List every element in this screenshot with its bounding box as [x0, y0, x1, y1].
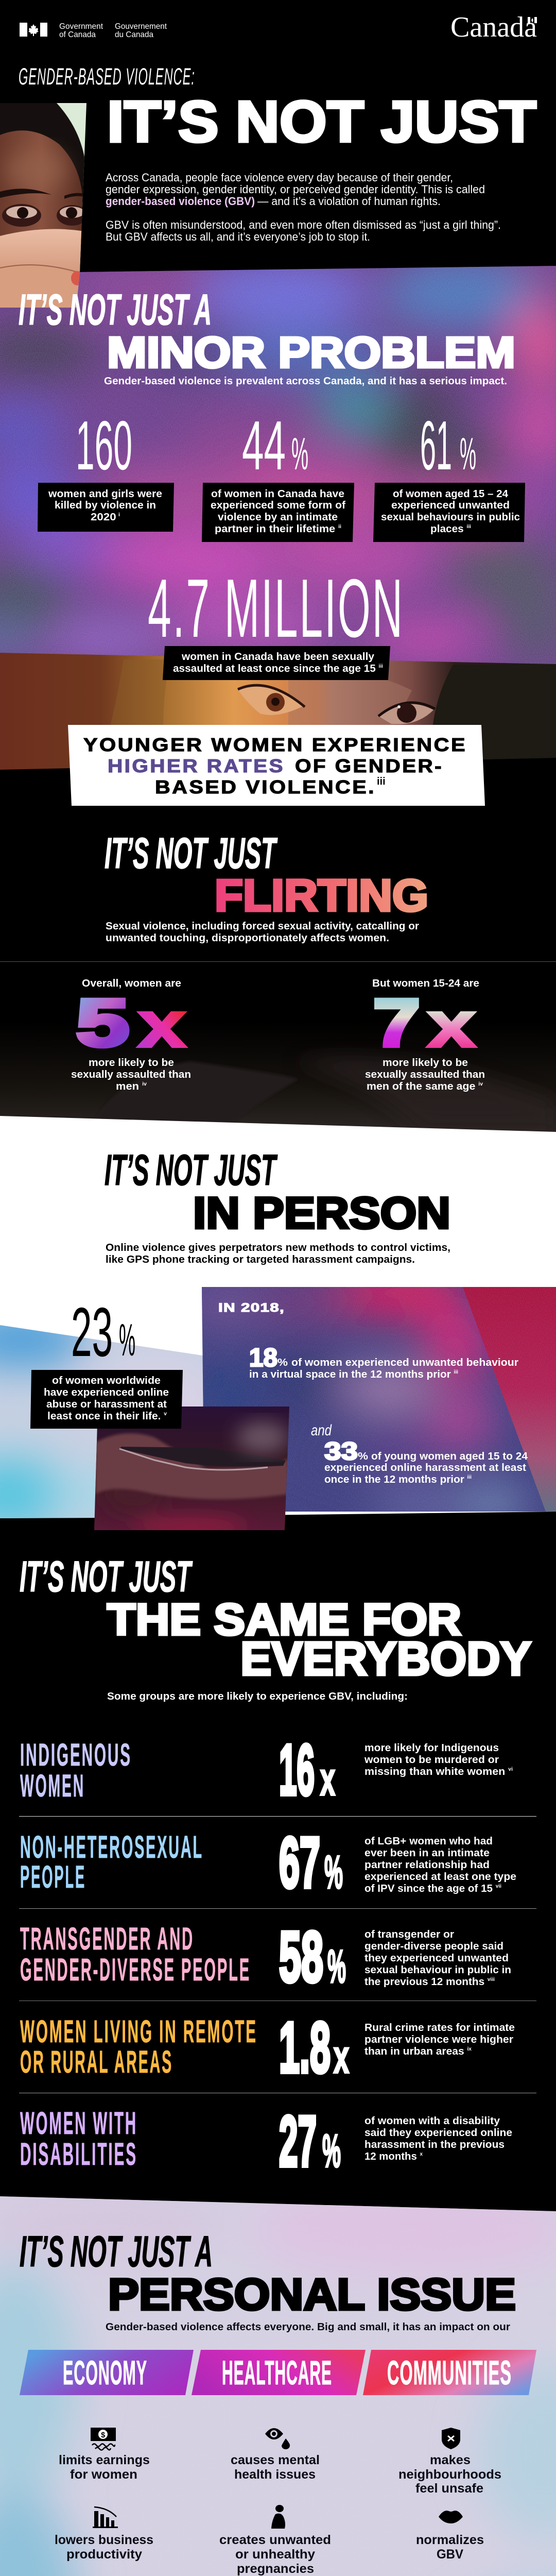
text block: introduction	[106, 171, 501, 243]
caption: 67%: of IPV since the age of 15	[364, 1883, 492, 1894]
label: non-heterosexual people: PEOPLE	[20, 1859, 86, 1894]
row: transgender and gender-diverse people: GENDER-DIVERSE PEOPLE	[20, 1952, 251, 1987]
row: women with disabilities	[20, 2102, 512, 2181]
caption: 44 percent	[211, 488, 345, 535]
label: women in remote or rural areas	[20, 2014, 257, 2079]
stat: 4.7 million	[148, 562, 404, 680]
caption: 16x: women to be murdered or	[364, 1754, 499, 1766]
caption: 44 percent: of women in Canada have	[211, 488, 344, 500]
stat: 33 percent: 33	[324, 1438, 358, 1465]
heading: it's not just (the same): IT’S NOT JUST	[20, 1552, 193, 1601]
label: Indigenous women: WOMEN	[20, 1768, 85, 1803]
text: causes mental health issues: causes mental	[231, 2453, 320, 2467]
text block: introduction: — and it’s a violation of human rights.	[257, 195, 441, 208]
stat: 18 percent: %	[277, 1357, 288, 1368]
label: women with disabilities	[20, 2106, 137, 2172]
heading: minor problem: MINOR PROBLEM	[107, 328, 515, 377]
text: Gouvernement du Canada	[115, 22, 167, 39]
text: Government of Canada: of Canada	[59, 30, 96, 39]
row: women in remote or rural areas	[20, 2008, 515, 2088]
panel: crimson and blue gradient	[202, 1287, 556, 1512]
number: 1.8x: x	[334, 2031, 349, 2083]
caption: 27%: 12 months	[364, 2150, 418, 2162]
panel: personal issue pastel gradient	[0, 2184, 556, 2576]
stat: 33 percent: once in the 12 months prior	[324, 1473, 463, 1485]
caption: 44 percent: experienced some form of	[211, 499, 345, 511]
stat: 160 women and girls	[38, 406, 174, 532]
item: limits earnings	[59, 2428, 150, 2482]
stat: 18 percent: of women experienced unwanted behaviour	[291, 1357, 518, 1368]
caption: 7x: sexually assaulted than	[365, 1069, 485, 1080]
caption: 58%: viii	[488, 1977, 495, 1982]
icon: lips	[439, 2511, 463, 2523]
heading: it's not just (in person): IT’S NOT JUST	[105, 1146, 278, 1194]
text: limits earnings: for women	[70, 2467, 137, 2482]
text: flirting intro: Sexual violence, including forced sexual activity, catcalling or	[106, 920, 419, 932]
text: Gouvernement du Canada: du Canada	[115, 30, 153, 39]
number: 44%: 44	[242, 406, 286, 484]
caption: 160: killed by violence in	[55, 499, 156, 511]
number: 27%: 27	[279, 2102, 317, 2181]
caption: 1.8x: than in urban areas	[364, 2045, 462, 2057]
stat: 33 percent: experienced online harassment at least	[324, 1462, 526, 1473]
tab: healthcare: HEALTHCARE	[222, 2353, 332, 2392]
heading: it's not just a (personal): IT’S NOT JUST A	[20, 2227, 213, 2276]
item: unwanted or unhealthy pregnancies	[219, 2505, 331, 2576]
caption: 61 percent: sexual behaviours in public	[381, 511, 520, 523]
caption: 58%: of transgender or	[364, 1928, 454, 1940]
text: Gouvernement du Canada: Gouvernement	[115, 22, 167, 31]
callout: younger women experience higher rates: YOUNGER WOMEN EXPERIENCE	[83, 734, 467, 755]
row: women with disabilities: %	[322, 2126, 341, 2177]
number: 1.8x: 1.8	[279, 2008, 331, 2088]
heading: it's not just (flirting): IT’S NOT JUST	[105, 829, 278, 877]
row: women with disabilities: DISABILITIES	[20, 2137, 137, 2172]
stat: 18 percent: iii	[454, 1369, 458, 1375]
text: normalizes GBV: GBV	[437, 2547, 463, 2562]
tab: economy	[20, 2350, 194, 2395]
text: unwanted or unhealthy pregnancies: creates unwanted	[219, 2533, 331, 2547]
text: causes mental health issues	[231, 2453, 320, 2482]
caption: 61 percent: places	[430, 523, 463, 535]
text: personal issue intro: Gender-based violence affects everyone. Big and small, it has an impact on our	[106, 2321, 510, 2333]
caption: 1.8x: ix	[467, 2046, 472, 2052]
text: flirting intro	[106, 920, 419, 944]
stat: 33 percent: of young women aged 15 to 24	[371, 1450, 528, 1462]
label: women in remote or rural areas: OR RURAL AREAS	[20, 2044, 173, 2079]
text: lowers business productivity: productivity	[66, 2547, 142, 2562]
row: Indigenous women: INDIGENOUS	[20, 1737, 132, 1772]
text: Government of Canada: Government	[59, 22, 103, 31]
photo: close-up of young woman's eyes	[0, 649, 556, 773]
number: 5x	[76, 985, 186, 1061]
text: in person intro: Online violence gives perpetrators new methods to control victims,	[106, 1242, 450, 1253]
label: in 2018: IN 2018,	[218, 1301, 285, 1315]
text block: introduction: gender-based violence (GBV)	[106, 195, 255, 208]
caption: 44 percent: partner in their lifetime	[215, 523, 329, 535]
caption: 67%: partner relationship had	[364, 1859, 490, 1871]
caption: 67%: vii	[496, 1884, 501, 1889]
row: transgender and gender-diverse people: %	[327, 1941, 346, 1993]
stat: 33 percent: iii	[467, 1475, 472, 1480]
caption: 16x: more likely for Indigenous	[364, 1742, 499, 1754]
caption: 23 percent: of women worldwide	[52, 1375, 161, 1386]
callout: younger women experience higher rates: HIGHER RATES	[108, 755, 285, 776]
stat: 18 percent: 18	[249, 1343, 277, 1372]
label: transgender and gender-diverse people: TRANSGENDER AND	[20, 1921, 194, 1956]
caption: 61 percent: experienced unwanted	[391, 499, 510, 511]
text: limits earnings	[59, 2453, 150, 2482]
caption: 58%: gender-diverse people said	[364, 1940, 503, 1952]
icon: falling bar chart	[93, 2507, 118, 2528]
row: non-heterosexual people: %	[324, 1847, 343, 1899]
caption: 44 percent: ii	[338, 524, 341, 530]
caption: 7x: men of the same age	[367, 1080, 471, 1092]
caption: 4.7 million	[173, 651, 383, 674]
number: 7x	[373, 985, 476, 1061]
callout: younger women experience higher rates: iii	[377, 776, 386, 787]
callout: younger women experience higher rates: BASED VIOLENCE.	[155, 776, 376, 798]
text: flirting intro: unwanted touching, disproportionately affects women.	[106, 932, 389, 944]
icon: pregnant person	[271, 2505, 285, 2529]
text: causes mental health issues: health issues	[234, 2467, 316, 2482]
text: makes neighbourhoods feel unsafe: neighbourhoods	[398, 2467, 501, 2482]
text: minor problem intro: Gender-based violence is prevalent across Canada, and it has a serious impact.	[104, 375, 507, 387]
row: women in remote or rural areas: WOMEN LIVING IN REMOTE	[20, 2014, 257, 2049]
label: but women 15-24: But women 15-24 are	[372, 977, 479, 989]
number: 58%: 58	[279, 1917, 323, 1997]
icon: eye with tear	[265, 2428, 290, 2449]
panel: dim bed photo backdrop	[0, 961, 556, 1133]
heading: the same for everybody: THE SAME FOR	[107, 1595, 461, 1645]
number: 7x: x	[427, 988, 476, 1061]
callout box: 23 percent	[30, 1370, 183, 1429]
stat: 33 percent	[324, 1438, 528, 1485]
stat: 18 percent: in a virtual space in the 12 months prior	[249, 1368, 448, 1380]
item: makes neighbourhoods feel unsafe	[398, 2428, 501, 2496]
caption: 4.7 million: iii	[379, 664, 383, 669]
stat: women 5x	[71, 977, 191, 1092]
callout box: 160	[38, 483, 174, 532]
caption: 58%: sexual behaviour in public in	[364, 1964, 511, 1976]
caption: 7x: more likely to be	[383, 1057, 468, 1069]
text: and: and	[311, 1422, 332, 1439]
stat: 44 percent	[202, 406, 354, 542]
heading: gender-based violence: GENDER-BASED VIOLENCE:	[19, 63, 195, 90]
caption: 16x: missing than white women	[364, 1766, 499, 1777]
caption: 27%: said they experienced online	[364, 2127, 512, 2139]
text: unwanted or unhealthy pregnancies: pregnancies	[237, 2562, 314, 2576]
caption: 23 percent: v	[164, 1411, 167, 1417]
text block: introduction: GBV is often misunderstood, and even more often dismissed as “just a girl thing”.	[106, 218, 501, 231]
stat: 61 percent	[373, 406, 525, 542]
caption: 1.8x	[364, 2022, 515, 2057]
caption: 27%	[364, 2115, 512, 2162]
caption: 16x	[364, 1742, 513, 1777]
number: 23%: 23	[71, 1293, 113, 1371]
label: Indigenous women	[20, 1737, 132, 1803]
text: in person intro	[106, 1242, 450, 1265]
stat: 44 percent: %	[291, 428, 308, 479]
tab: healthcare	[192, 2350, 366, 2395]
row: transgender and gender-diverse people	[20, 1917, 511, 1997]
number: 16x: 16	[279, 1730, 315, 1810]
caption: 23 percent: abuse or harassment at	[46, 1398, 167, 1410]
text: unwanted or unhealthy pregnancies	[219, 2533, 331, 2576]
row: non-heterosexual people: NON-HETEROSEXUAL	[20, 1829, 203, 1865]
caption: 1.8x: partner violence were higher	[364, 2033, 513, 2045]
icon: Canadian flag symbol	[20, 23, 47, 37]
callout: younger women experience higher rates	[68, 725, 485, 806]
number: 67%: 67	[279, 1823, 320, 1903]
callout: younger women experience higher rates: OF GENDER-	[295, 755, 443, 776]
panel: gradient backdrop for minor problem	[0, 247, 556, 670]
caption: 5x	[71, 1057, 191, 1092]
caption: 5x: iv	[142, 1081, 147, 1087]
text: makes neighbourhoods feel unsafe: feel unsafe	[415, 2481, 483, 2496]
stat: 33 percent: %	[358, 1450, 368, 1462]
caption: 5x: more likely to be	[89, 1057, 174, 1069]
label: non-heterosexual people	[20, 1829, 203, 1894]
stat: 160 women and girls: 160	[76, 406, 132, 484]
caption: 4.7 million: women in Canada have been sexually	[181, 651, 375, 663]
title: it's not just: IT’S NOT JUST	[107, 89, 536, 154]
caption: 160: women and girls were	[48, 488, 162, 500]
caption: 58%: they experienced unwanted	[364, 1952, 509, 1964]
number: 5x: x	[137, 988, 186, 1061]
caption: 67%: ever been in an intimate	[364, 1847, 490, 1859]
number: 7x: 7	[373, 985, 420, 1060]
caption: 61 percent: of women aged 15 – 24	[393, 488, 509, 500]
number: 5x: 5	[76, 985, 129, 1060]
tab: economy: ECONOMY	[63, 2353, 147, 2392]
caption: 16x: vi	[508, 1767, 513, 1772]
caption: 67%	[364, 1835, 516, 1894]
logo: Canada wordmark: Canada	[450, 11, 537, 43]
item: normalizes GBV	[416, 2511, 484, 2562]
photo: woman covering her mouth with her arm	[0, 103, 88, 309]
caption: 160: 2020	[91, 511, 114, 523]
stat: 18 percent	[249, 1343, 518, 1380]
label: transgender and gender-diverse people	[20, 1921, 251, 1987]
photo: hand holding phone	[93, 1405, 291, 1538]
label: overall: Overall, women are	[82, 977, 181, 989]
caption: 7x	[365, 1057, 485, 1092]
caption: 44 percent: violence by an intimate	[218, 511, 338, 523]
text: limits earnings: limits earnings	[59, 2453, 150, 2467]
icon: shield with x	[442, 2428, 460, 2449]
caption: 23 percent: have experienced online	[44, 1386, 169, 1398]
text: Government of Canada	[59, 22, 103, 39]
caption: 67%: experienced at least one type	[364, 1871, 516, 1883]
text: makes neighbourhoods feel unsafe	[398, 2453, 501, 2496]
text: normalizes GBV: normalizes	[416, 2533, 484, 2547]
text: unwanted or unhealthy pregnancies: or unhealthy	[235, 2547, 315, 2562]
item: causes mental health issues	[231, 2428, 320, 2482]
row: non-heterosexual people	[20, 1823, 516, 1903]
caption: 61 percent: iii	[467, 524, 471, 530]
caption: 61 percent	[381, 488, 520, 535]
item: lowers business productivity	[55, 2507, 153, 2562]
text: in person intro: like GPS phone tracking or targeted harassment campaigns.	[106, 1253, 415, 1265]
caption: 27%: x	[420, 2151, 423, 2157]
row: women with disabilities: WOMEN WITH	[20, 2106, 137, 2141]
tab: communities	[363, 2350, 536, 2395]
icon: banknote over waves: $	[101, 2431, 106, 2439]
logo: Government of Canada signature	[20, 22, 167, 39]
caption: 5x: sexually assaulted than	[71, 1069, 191, 1080]
caption: 1.8x: Rural crime rates for intimate	[364, 2022, 515, 2033]
stat: women 15-24 7x	[365, 977, 485, 1092]
panel: in person white section	[0, 1116, 556, 1518]
row: Indigenous women	[20, 1730, 513, 1810]
text: lowers business productivity	[55, 2533, 153, 2562]
panel: pale blue gradient	[0, 1325, 203, 1518]
heading: in person: IN PERSON	[193, 1189, 450, 1238]
stat: 23 percent	[30, 1293, 291, 1538]
text block: introduction: gender expression, gender identity, or perceived gender identity. This is called	[106, 183, 485, 196]
caption: 23 percent: least once in their life.	[47, 1410, 158, 1422]
text: normalizes GBV	[416, 2533, 484, 2562]
caption: 160	[48, 488, 162, 523]
stat: 61 percent: %	[460, 428, 476, 479]
text: same for everybody intro: Some groups are more likely to experience GBV, including:	[107, 1690, 408, 1702]
heading: the same for everybody	[107, 1595, 531, 1685]
caption: 23 percent	[44, 1375, 169, 1422]
number: 16x: x	[320, 1754, 335, 1805]
caption: 67%: of LGB+ women who had	[364, 1835, 493, 1847]
stat: 23 percent: %	[119, 1314, 135, 1365]
text: lowers business productivity: lowers business	[55, 2533, 153, 2547]
heading: personal issue: PERSONAL ISSUE	[108, 2270, 516, 2319]
heading: the same for everybody: EVERYBODY	[240, 1633, 531, 1685]
number: 61%: 61	[420, 406, 452, 484]
caption: 27%: of women with a disability	[364, 2115, 500, 2127]
caption: 58%	[364, 1928, 511, 1988]
text block: introduction: Across Canada, people face violence every day because of their gender,	[106, 171, 453, 184]
heading: it's not just a: IT’S NOT JUST A	[19, 285, 212, 334]
text: makes neighbourhoods feel unsafe: makes	[430, 2453, 471, 2467]
caption: 5x: men	[116, 1080, 137, 1092]
caption: 160: i	[118, 512, 120, 518]
caption: 27%: harassment in the previous	[364, 2139, 505, 2150]
caption: 58%: the previous 12 months	[364, 1976, 483, 1988]
callout box: 4.7 million	[163, 646, 390, 680]
heading: flirting: FLIRTING	[215, 871, 428, 921]
callout box: 61 percent	[373, 483, 525, 542]
icon: banknote over waves	[91, 2428, 116, 2450]
text block: introduction: But GBV affects us all, and it’s everyone’s job to stop it.	[106, 230, 370, 243]
caption: 4.7 million: assaulted at least once since the age 15	[173, 663, 373, 674]
callout box: 44 percent	[202, 483, 354, 542]
caption: 7x: iv	[478, 1081, 483, 1087]
stat: in 2018	[218, 1301, 528, 1485]
